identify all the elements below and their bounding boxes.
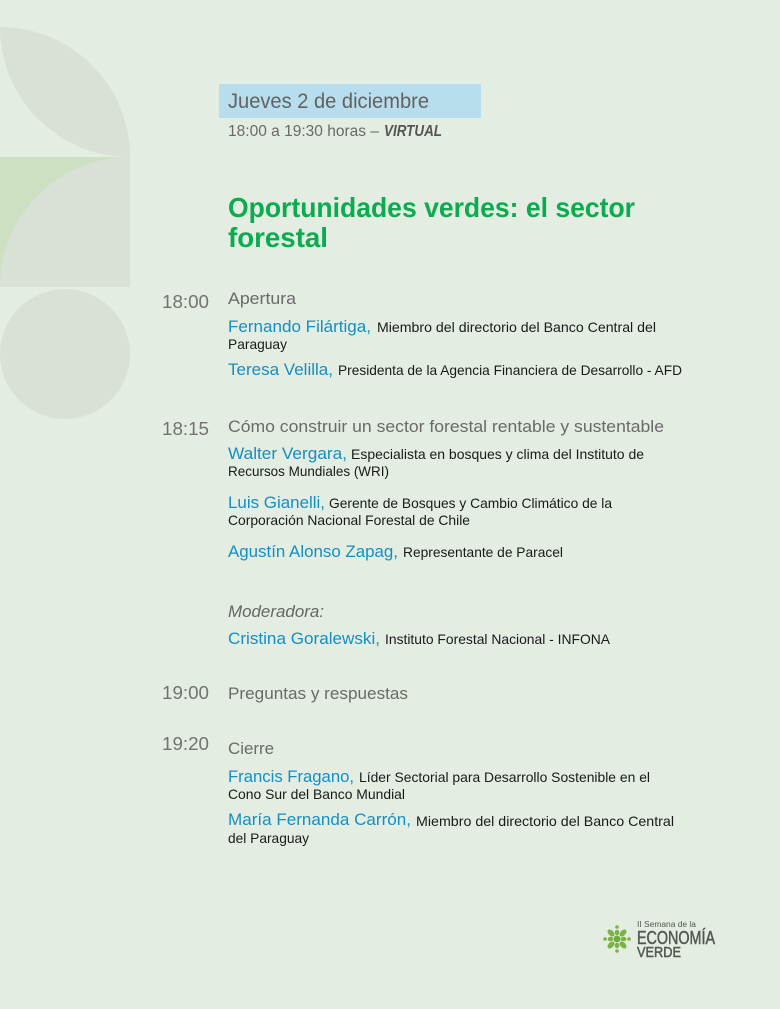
shape: circle xyxy=(0,289,130,419)
shape: green square xyxy=(0,157,130,287)
logo text: ECONOMÍA xyxy=(637,928,715,948)
block: moderadora xyxy=(228,602,611,648)
block: 18:00 apertura: Presidenta de la Agencia Financiera de Desarrollo - AFD xyxy=(338,363,682,378)
block: 18:15 panel: Representante de Paracel xyxy=(403,545,563,560)
block: 19:20 cierre: Cono Sur del Banco Mundial xyxy=(228,787,405,802)
title: Oportunidades verdes: el sector xyxy=(228,192,635,223)
block: 18:00 apertura: Apertura xyxy=(228,289,297,308)
event time: VIRTUAL xyxy=(384,123,442,140)
block: 18:15 panel: Recursos Mundiales (WRI) xyxy=(228,464,389,479)
date banner: Jueves 2 de diciembre xyxy=(228,90,429,113)
date banner xyxy=(219,84,481,118)
block: 18:00 apertura xyxy=(162,289,682,379)
block: 18:00 apertura: Paraguay xyxy=(228,337,287,352)
decorative geometric shapes xyxy=(0,27,130,419)
block: 19:20 cierre: María Fernanda Carrón, xyxy=(228,810,411,829)
title: forestal xyxy=(228,222,328,253)
block: 18:15 panel: Agustín Alonso Zapag, xyxy=(228,542,398,561)
logo text: VERDE xyxy=(637,944,681,961)
block: moderadora: Moderadora: xyxy=(228,602,324,621)
logo text xyxy=(637,920,715,961)
logo: Semana de la Economía Verde xyxy=(603,920,715,961)
block: 18:15 panel xyxy=(162,417,664,561)
block: 19:20 cierre: Francis Fragano, xyxy=(228,767,354,786)
block: 19:20 cierre: Cierre xyxy=(228,739,274,758)
block: 18:15 panel: Walter Vergara, xyxy=(228,444,347,463)
block: 18:00 apertura: Fernando Filártiga, xyxy=(228,317,371,336)
block: 19:20 cierre: Líder Sectorial para Desarrollo Sostenible en el xyxy=(359,770,650,785)
shape: leaf xyxy=(0,27,130,157)
block: 19:20 cierre xyxy=(162,733,674,846)
block: 18:00 apertura: 18:00 xyxy=(162,291,209,312)
icon: green flower xyxy=(603,925,631,953)
block: 18:00 apertura: Teresa Velilla, xyxy=(228,360,333,379)
block: 19:20 cierre: Miembro del directorio del Banco Central xyxy=(416,814,674,829)
logo text: II Semana de la xyxy=(637,920,697,929)
block: moderadora: Cristina Goralewski, xyxy=(228,629,380,648)
block: 18:15 panel: Corporación Nacional Forestal de Chile xyxy=(228,513,470,528)
block: 18:15 panel: 18:15 xyxy=(162,418,209,439)
block: 18:00 apertura: Miembro del directorio del Banco Central del xyxy=(377,320,656,335)
block: 19:00 preguntas: 19:00 xyxy=(162,682,209,703)
block: 18:15 panel: Especialista en bosques y clima del Instituto de xyxy=(351,447,644,462)
block: 18:15 panel: Gerente de Bosques y Cambio Climático de la xyxy=(329,496,612,511)
block: 18:15 panel: Luis Gianelli, xyxy=(228,493,325,512)
event time: 18:00 a 19:30 horas – xyxy=(228,123,379,140)
block: moderadora: Instituto Forestal Nacional - INFONA xyxy=(385,632,611,647)
block: 19:20 cierre: 19:20 xyxy=(162,733,209,754)
shape: quarter circle xyxy=(0,157,130,287)
title xyxy=(228,192,635,253)
block: 19:20 cierre: del Paraguay xyxy=(228,831,309,846)
block: 19:00 preguntas: Preguntas y respuestas xyxy=(228,684,408,703)
block: 18:15 panel: Cómo construir un sector forestal rentable y sustentable xyxy=(228,417,664,436)
block: 19:00 preguntas xyxy=(162,682,408,703)
